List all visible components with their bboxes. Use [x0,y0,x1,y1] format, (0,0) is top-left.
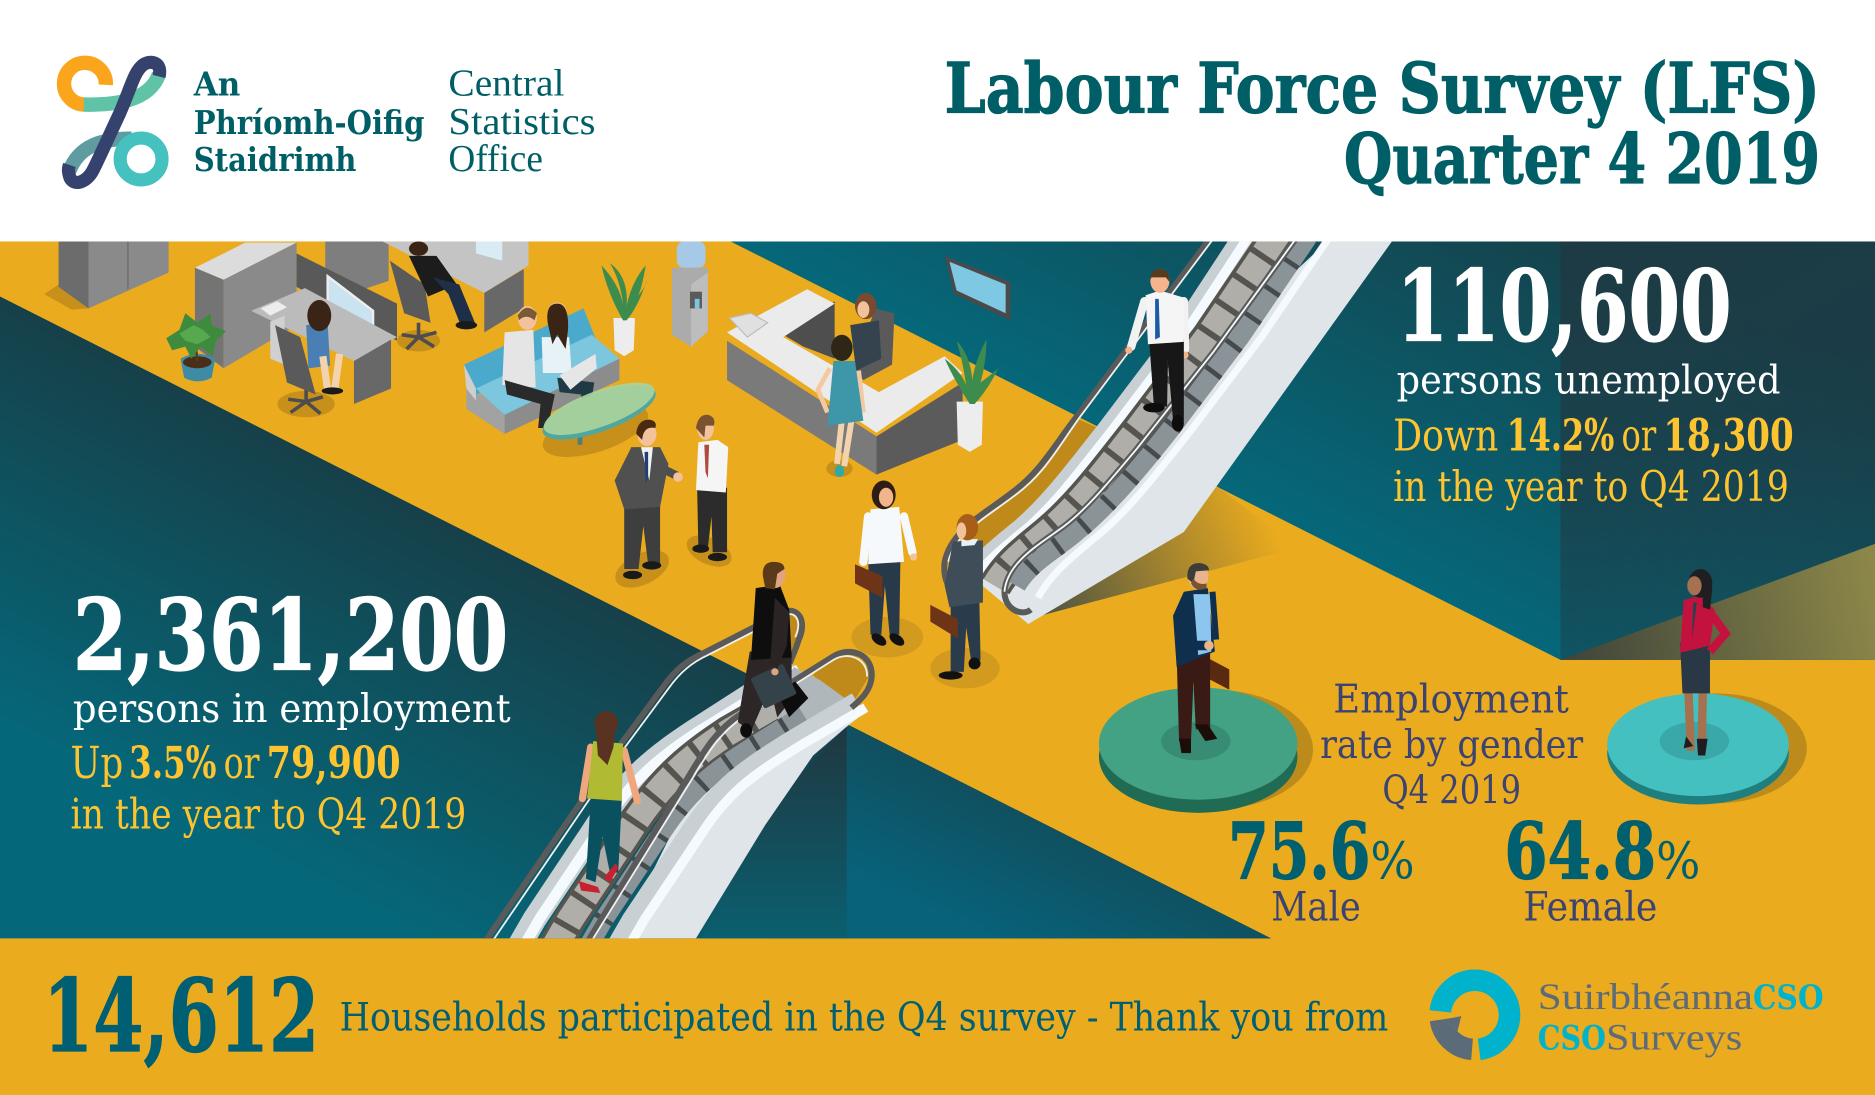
lower right teal wall [847,724,1271,938]
plant by sofa [601,263,647,356]
left teal wall [0,296,1271,938]
right handrail [586,652,872,944]
employment change [71,737,401,789]
left handrail [483,611,802,944]
woman with briefcase [851,481,923,657]
households text: Households participated in the Q4 survey - Thank you from [340,994,1388,1040]
logo wordmark Irish: Staidrimh [194,141,356,179]
sofa with two people and coffee table [464,302,662,468]
upper escalator [944,233,1392,624]
right slatted band [586,715,804,950]
yellow floor [0,241,1875,1095]
employment period: in the year to Q4 2019 [71,789,466,838]
employment stat block [71,578,511,838]
steps [552,691,799,950]
handrail recess [972,420,1096,548]
employment rate heading [1320,676,1583,813]
plant by reception [945,339,998,452]
left balustrade [517,667,794,950]
top platform [774,667,844,720]
CSO Surveys English label: Surveys [1606,1018,1742,1059]
CSO Surveys Irish label [1538,977,1824,1018]
man in white shirt talking [682,415,736,573]
right handrail highlight [1004,237,1297,592]
cubicle partition block [195,241,389,368]
reception desk [727,289,963,475]
employment change: 3.5% [129,737,216,789]
title [945,48,1820,200]
employment rate heading: Employment [1333,676,1569,722]
male platform [1099,687,1313,813]
icon: CSO Surveys speech ring [1440,980,1509,1049]
man on upper escalator [1125,269,1189,432]
steps base [552,708,771,950]
employment change: or [224,738,260,789]
side panel [619,701,868,938]
households number: 14,612 [43,957,319,1075]
header band [0,0,1875,241]
unemployed period: in the year to Q4 2019 [1393,462,1789,511]
dark shade on right wall [1561,241,1875,660]
CSO Surveys Irish label: CSO [1753,978,1824,1017]
CSO Surveys English label: CSO [1538,1019,1606,1058]
logo wordmark Irish [193,66,425,179]
bottom band [43,957,1824,1075]
female rate: % [1656,832,1700,891]
unemployed change [1393,410,1794,462]
woman figure [1680,569,1726,756]
employment change: Up [71,738,123,789]
left handrail highlight [948,237,1215,562]
panel: employment rate by gender [1099,563,1807,930]
seated woman at desk [275,300,343,417]
unemployed change: or [1621,411,1657,462]
logo wordmark Irish: Phríomh-Oifig [194,104,425,142]
female label: Female [1523,882,1657,930]
logo: grey-teal band [69,139,132,171]
logo wordmark English: Office [448,138,543,180]
woman in teal dress [818,335,863,477]
CSO logo [64,62,162,182]
upper right teal wall [731,241,1875,660]
potted tree [166,313,226,381]
wall monitor [945,256,1010,320]
man figure [1173,563,1229,753]
left balustrade highlight [976,233,1251,576]
CSO Surveys English label [1538,1018,1742,1059]
male rate: % [1370,832,1415,891]
left handrail [944,237,1211,595]
logo wordmark Irish: An [193,66,240,104]
employment change: 79,900 [267,737,401,789]
woman in lime top on escalator [579,711,637,893]
employment label: persons in employment [73,686,511,732]
lower escalator [483,611,872,950]
right handrail recess [813,654,869,699]
logo: orange loop [64,63,106,105]
employment number: 2,361,200 [73,578,508,693]
left handrail highlight [490,614,798,944]
CSO Surveys Irish label: Suirbhéanna [1538,977,1753,1018]
second desk and man [383,241,529,351]
unemployed number: 110,600 [1397,250,1732,365]
office illustration [44,233,1392,950]
left balustrade highlight [521,669,799,950]
white strip [627,708,866,950]
filing cabinet [44,241,169,310]
male rate: 75.6 [1228,807,1370,898]
side panel [978,241,1392,624]
right slatted band [1016,233,1311,586]
steps [995,233,1278,586]
logo: navy ribbon [68,62,160,182]
logo wordmark English: Statistics [448,101,596,143]
logo: green band [84,74,159,105]
outer white strip [1038,233,1332,598]
receptionist [850,293,894,380]
right handrail highlight [590,656,867,944]
olive light wedge [1561,544,1875,660]
employment rate heading: rate by gender [1320,722,1583,768]
desk with monitor [251,253,397,404]
logo: cyan ring [120,138,162,180]
shadow of upper escalator [1044,486,1270,615]
right slats [594,718,790,926]
logo wordmark English [448,63,596,180]
man in black suit on escalator [738,562,808,738]
left balustrade [971,233,1246,576]
steps base [995,233,1278,586]
unemployed change: 14.2% [1507,410,1614,462]
unemployed label: persons unemployed [1397,357,1781,403]
right slats [1016,233,1311,586]
man in grey suit [610,420,683,595]
light strip [612,701,856,950]
female platform [1607,693,1807,805]
dark wall under lower escalator [701,727,847,938]
employment rate heading: Q4 2019 [1382,767,1521,813]
unemployed change: Down [1393,411,1498,462]
man from behind with briefcase [930,514,1000,689]
unemployment stat block [1393,250,1794,511]
left handrail recess [790,615,799,652]
right handrail [1004,237,1297,612]
unemployed change: 18,300 [1663,410,1794,462]
male label: Male [1271,882,1361,930]
female rate: 64.8 [1504,807,1656,898]
water cooler [672,241,708,347]
logo wordmark English: Central [448,63,564,105]
